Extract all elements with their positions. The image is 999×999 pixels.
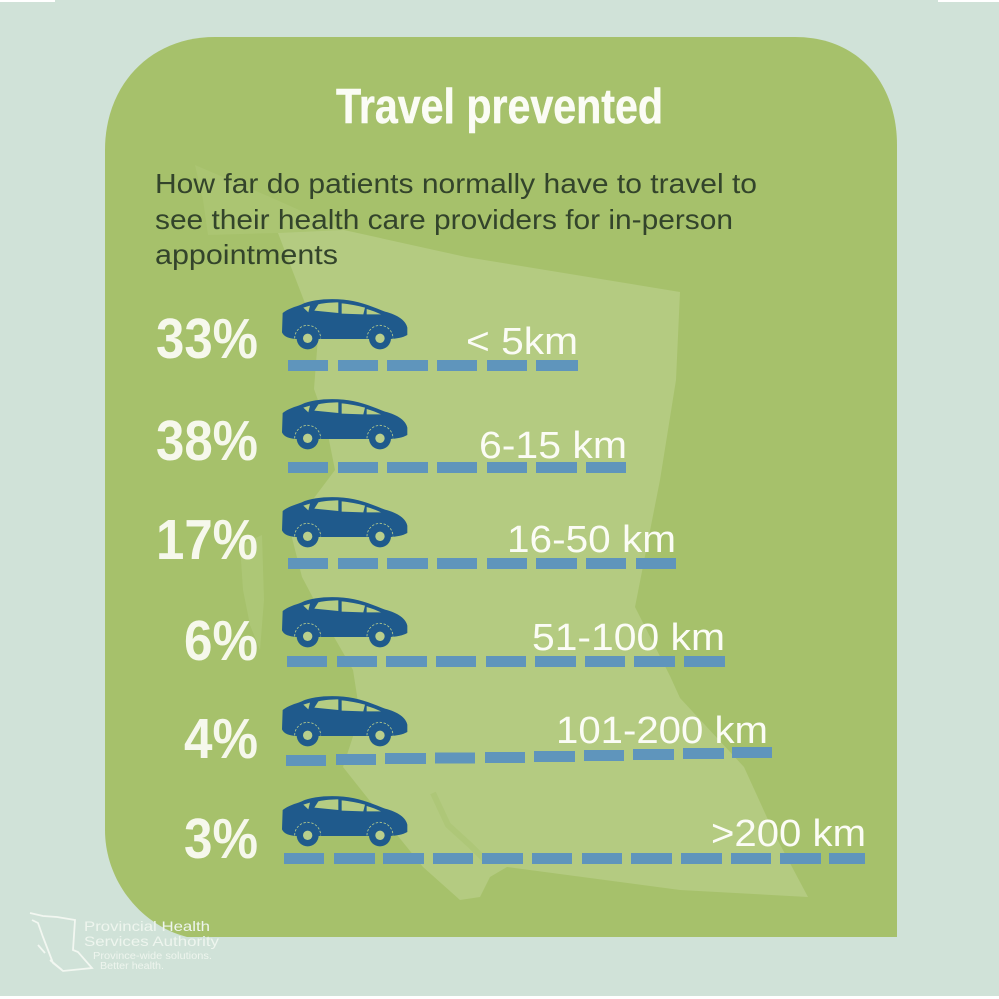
map: British Columbia silhouette — [195, 165, 808, 900]
row: 17% 16-50 km — [156, 497, 676, 572]
row: 38% 6-15 km: 38% — [156, 409, 258, 473]
logo: Provincial Health Services Authority: Better health. — [100, 961, 164, 972]
row: 17% 16-50 km: 16-50 km — [507, 519, 676, 561]
row: 3% over 200 km: >200 km — [711, 813, 866, 855]
intro text: How far do patients normally have to travel to — [155, 168, 757, 199]
row: 33% under 5 km: < 5km — [466, 321, 578, 363]
row: 4% 101-200 km — [184, 696, 772, 771]
row: 4% 101-200 km: 4% — [184, 707, 258, 771]
row: 6% 51-100 km: 6% — [184, 609, 258, 673]
logo: Provincial Health Services Authority: Services Authority — [84, 933, 219, 949]
row: 38% 6-15 km: 6-15 km — [479, 425, 627, 467]
logo: Provincial Health Services Authority: Province-wide solutions. — [93, 951, 212, 962]
row: 33% under 5 km: 33% — [156, 307, 258, 371]
row: 6% 51-100 km — [184, 597, 725, 673]
row: 6% 51-100 km: 51-100 km — [532, 617, 725, 659]
intro text — [155, 168, 757, 270]
row: 3% over 200 km: 3% — [184, 807, 258, 871]
title: Travel prevented — [336, 80, 663, 134]
intro text: appointments — [155, 239, 338, 270]
row: 38% 6-15 km — [156, 399, 627, 473]
row: 17% 16-50 km: 17% — [156, 508, 258, 572]
intro text: see their health care providers for in-person — [155, 204, 733, 235]
row: 4% 101-200 km: 101-200 km — [556, 710, 768, 752]
row: 33% under 5 km — [156, 299, 578, 371]
panel: green rounded card — [105, 37, 897, 937]
icon: BC outline — [30, 913, 92, 971]
logo: Provincial Health Services Authority: Provincial Health — [84, 918, 210, 934]
logo: Provincial Health Services Authority — [30, 913, 219, 972]
row: 3% over 200 km — [184, 796, 866, 871]
